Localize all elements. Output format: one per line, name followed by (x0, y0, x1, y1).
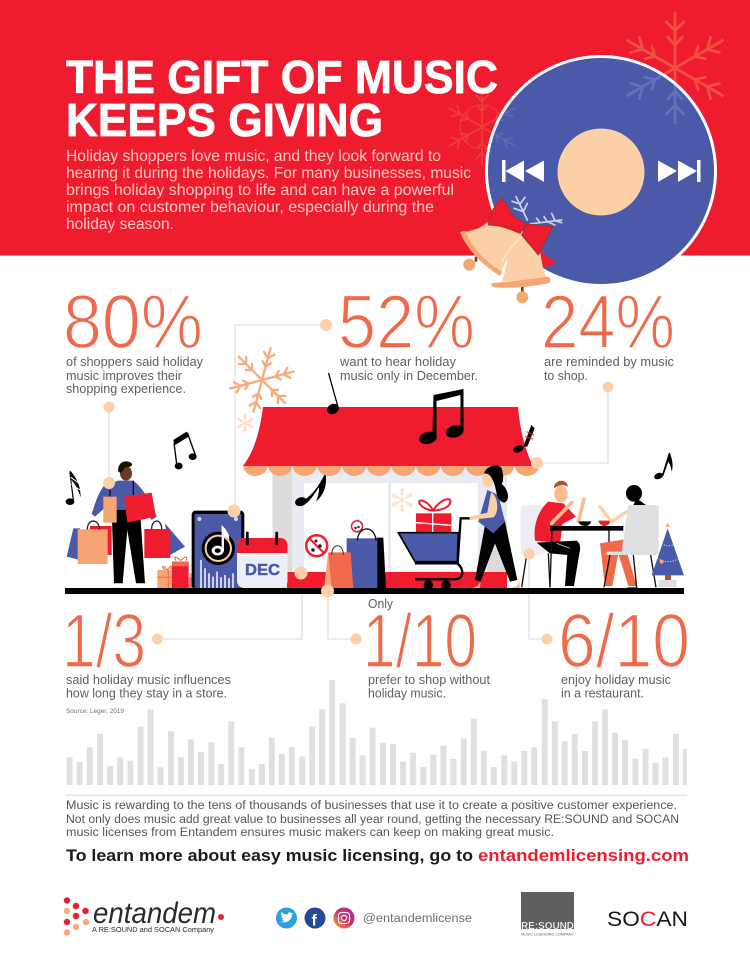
intro text (66, 148, 471, 233)
intro text: brings holiday shopping to life and can have a powerful (66, 182, 454, 199)
stat: 52%: 52% (338, 280, 475, 365)
icon: no-music sign small (352, 521, 362, 532)
logo: entandem: A RE:SOUND and SOCAN Company (92, 925, 214, 934)
stat: 1/10: prefer to shop without (368, 673, 491, 687)
intro text: hearing it during the holidays. For many businesses, music (66, 165, 471, 182)
icon: instagram (334, 908, 354, 928)
person: woman with cart (466, 466, 520, 591)
person: man (535, 481, 584, 591)
music notes on store (294, 373, 535, 507)
table (550, 521, 623, 587)
stat: 80%: of shoppers said holiday (66, 355, 204, 369)
note: awning right (512, 425, 535, 454)
stat: 80%: music improves their (66, 369, 182, 383)
logo: RE:SOUND: RE:SOUND (521, 920, 574, 932)
person: woman seated (600, 485, 659, 591)
snowflake small (446, 89, 518, 165)
cart (398, 518, 470, 590)
icon: previous (502, 160, 544, 182)
snowflake: peach large (223, 340, 301, 420)
icon: facebook: f (312, 912, 318, 930)
call to action: To learn more about easy music licensing, go to (66, 846, 473, 865)
stat: 52%: music only in December. (340, 369, 478, 383)
intro text: holiday season. (66, 216, 174, 233)
bags left (67, 521, 112, 564)
call to action: entandemlicensing.com (478, 846, 689, 865)
gift and shopping cart (398, 499, 470, 590)
social media (276, 908, 472, 930)
people at restaurant table (521, 481, 659, 591)
stat: 1/10: Only (368, 597, 394, 611)
christmas tree (652, 522, 684, 587)
person: shopper (92, 461, 157, 593)
title: KEEPS GIVING (66, 94, 383, 146)
call to action (66, 846, 689, 865)
stat: 24%: are reminded by music (544, 355, 674, 369)
awning (243, 407, 533, 466)
music notes around shopper (66, 432, 197, 505)
icon: facebook (304, 908, 326, 930)
chair: left (521, 505, 550, 587)
stat: 6/10: enjoy holiday music (561, 673, 671, 687)
bags right (144, 521, 185, 558)
logo dots (64, 897, 89, 936)
header panel (0, 0, 750, 256)
intro text: impact on customer behaviour, especially during the (66, 199, 434, 216)
stat: 24%: 24% (541, 280, 675, 365)
logo: entandem (64, 897, 224, 936)
note: awning centre (419, 389, 464, 444)
note: beamed (173, 432, 197, 469)
shopper and gifts (67, 461, 244, 593)
handle: @entandemlicense (363, 913, 472, 925)
stat: 80% (63, 280, 204, 396)
icon: no-music sign large (306, 535, 327, 556)
title: THE GIFT OF MUSIC (66, 51, 498, 103)
stat: 80%: 80% (63, 280, 203, 365)
closing paragraph: Not only does music add great value to businesses all year round, getting the necessary RE:SOUND and SOCAN (66, 812, 679, 826)
stat: 24%: to shop. (544, 369, 588, 383)
stat: 1/3 (62, 599, 231, 700)
connector dots (103, 319, 614, 644)
store (243, 407, 539, 588)
title (66, 51, 498, 146)
note: sixteenth (66, 471, 81, 505)
snowflake: peach small (236, 414, 254, 432)
sound wave bar chart (66, 680, 687, 785)
logo: RE:SOUND (521, 892, 575, 936)
snowflake large (623, 13, 727, 123)
gift boxes (157, 557, 199, 588)
record disc with player controls (485, 55, 717, 284)
gift (416, 499, 451, 533)
ground line (65, 588, 684, 594)
stat: 80%: shopping experience. (66, 382, 186, 396)
icon: twitter (276, 908, 297, 928)
stat: 1/10: 1/10 (363, 599, 477, 684)
note: store pillar (294, 475, 326, 507)
stat: 6/10: 6/10 (558, 599, 690, 684)
snowflake: window (391, 488, 413, 512)
icon: next (658, 160, 700, 182)
base red band (287, 572, 507, 588)
note: awning left (325, 373, 341, 416)
intro text: Holiday shoppers love music, and they look forward to (66, 148, 441, 165)
calendar: DEC: DEC (245, 562, 280, 579)
connector lines (109, 325, 608, 639)
window (304, 483, 388, 573)
stat: 1/3: how long they stay in a store. (66, 686, 227, 700)
closing paragraph (66, 798, 679, 839)
closing paragraph: music licenses from Entandem ensures music makers can keep on making great music. (66, 825, 554, 839)
store wall (272, 466, 507, 588)
icon: bells with bow (460, 197, 562, 303)
logo: RE:SOUND: MUSIC LICENSING COMPANY (521, 932, 575, 936)
closing paragraph: Music is rewarding to the tens of thousands of businesses that use it to create a positive customer experience. (66, 798, 677, 812)
stat: 52%: want to hear holiday (339, 355, 457, 369)
shopping bags at store (324, 529, 386, 588)
awning scallops (243, 465, 539, 476)
calendar: DEC (237, 533, 288, 588)
stat: 1/3: 1/3 (62, 599, 146, 684)
note: right of table (653, 453, 673, 480)
stat: 1/3: said holiday music influences (66, 673, 231, 687)
stat: 1/10: holiday music. (368, 686, 446, 700)
stat: 6/10: in a restaurant. (561, 686, 644, 700)
tablet with music icon (192, 511, 244, 589)
logo: SOCAN: SOCAN (607, 908, 688, 931)
source note: Source: Leger, 2019 (66, 708, 125, 715)
divider (66, 794, 687, 796)
logo: entandem: entandem (93, 897, 216, 930)
